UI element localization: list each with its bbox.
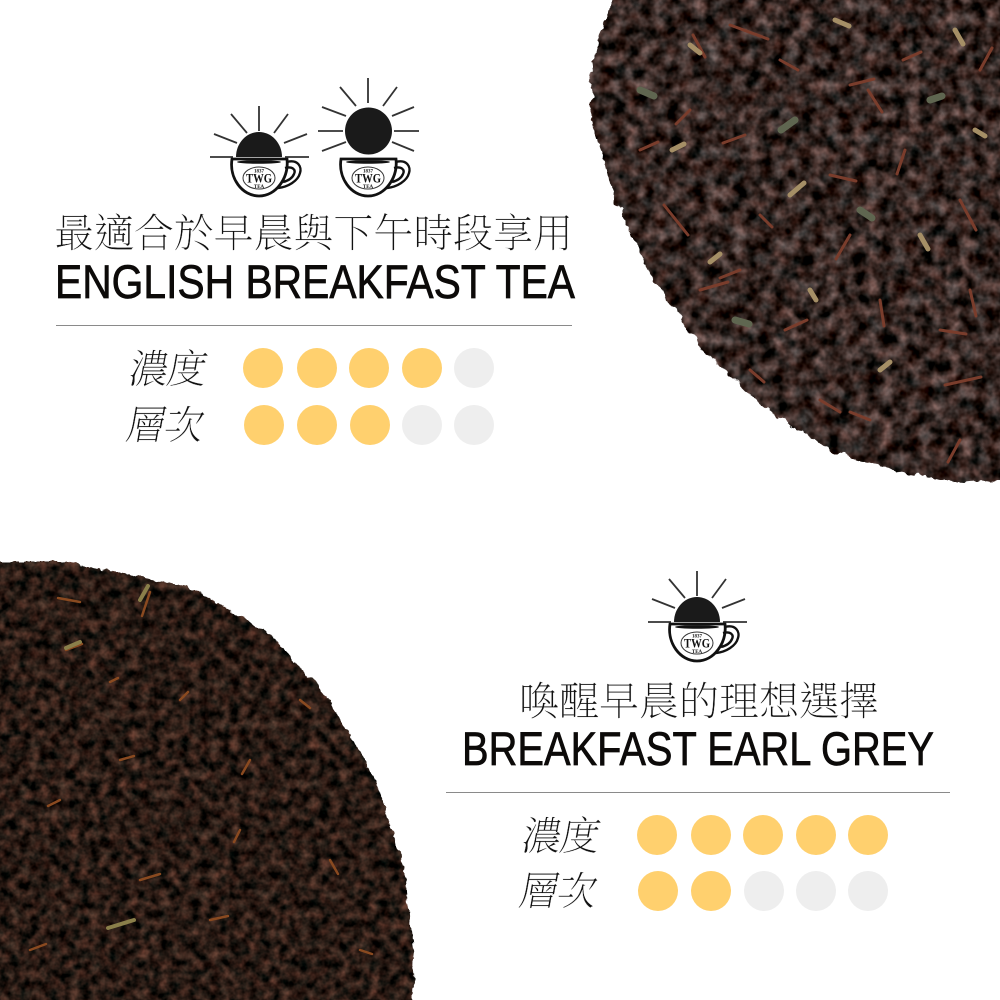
icon: half sun over TWG cup: TWG (246, 170, 272, 186)
label: layers: 層次 (122, 403, 208, 448)
icon: half sun over TWG cup: TWG (684, 636, 710, 650)
icon: full sun over TWG cup: 1837 (363, 170, 374, 174)
heading: tea name: ENGLISH BREAKFAST TEA (55, 255, 576, 308)
icon: half sun over TWG cup: TEA (254, 185, 265, 190)
panel: English Breakfast Tea (54, 78, 576, 448)
label: strength: 濃度 (518, 814, 604, 859)
rating: strength 5 of 5 (637, 815, 888, 855)
rating: layers 3 of 5 (244, 405, 494, 445)
icon: full sun over TWG cup: TEA (363, 185, 374, 190)
icon: half sun over TWG cup (648, 571, 747, 661)
icon: full sun over TWG cup (318, 78, 419, 196)
icon: half sun over TWG cup (210, 106, 309, 196)
icon: half sun over TWG cup: TEA (692, 650, 703, 655)
label: strength: 濃度 (125, 347, 211, 392)
rating: strength 4 of 5 (243, 348, 494, 388)
photo: Breakfast Earl Grey loose tea leaves (0, 562, 414, 1000)
rating: layers 2 of 5 (638, 871, 888, 911)
icon: half sun over TWG cup: 1837 (254, 170, 264, 174)
icon: half sun over TWG cup: 1837 (692, 634, 702, 640)
heading: Chinese tagline: 喚醒早晨的理想選擇 (519, 679, 879, 724)
photo: English Breakfast loose tea leaves (590, 0, 1000, 483)
icon: full sun over TWG cup: TWG (355, 170, 381, 186)
panel: Breakfast Earl Grey (446, 571, 950, 914)
heading: Chinese tagline: 最適合於早晨與下午時段享用 (54, 211, 573, 256)
label: layers: 層次 (515, 869, 601, 914)
